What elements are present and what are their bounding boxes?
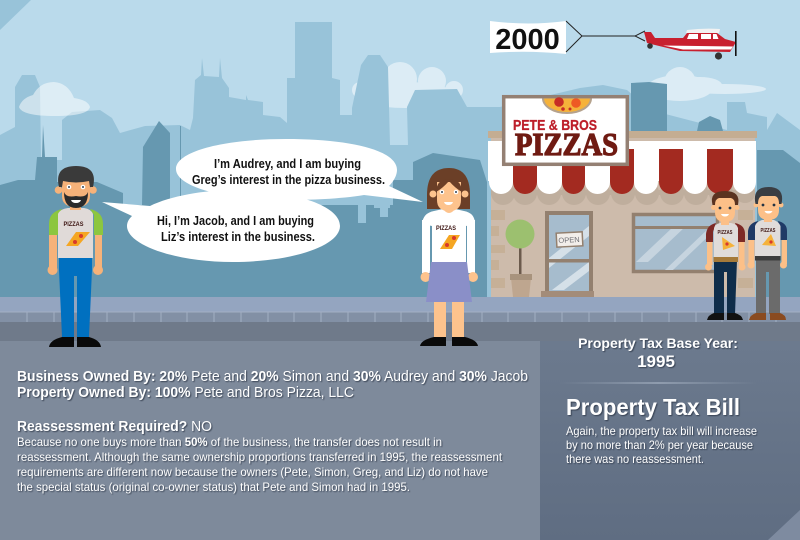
- plane body: [644, 29, 737, 60]
- shirt pizza: [762, 234, 776, 246]
- potted plant: [506, 220, 534, 297]
- tow rope: [566, 21, 645, 52]
- tax bill line 1: Again, the property tax bill will increase: [566, 424, 757, 438]
- ownership text block: [17, 368, 528, 494]
- sidewalk: [0, 297, 800, 341]
- shirt logo: PIZZAS: [436, 225, 457, 232]
- awning: [488, 141, 756, 194]
- character: man in maroon shirt: [705, 191, 746, 320]
- cloud right: [647, 67, 766, 101]
- light skyline: [0, 22, 800, 300]
- Jacob line 2: Liz’s interest in the business.: [161, 229, 315, 244]
- shop window: [634, 214, 718, 272]
- skyline window cutouts: [358, 200, 390, 223]
- sign pizza: [542, 97, 592, 114]
- banner: [490, 21, 566, 54]
- Audrey line 1: I’m Audrey, and I am buying: [214, 156, 361, 171]
- sky background: [0, 0, 800, 300]
- dark tower behind shop: [631, 82, 667, 135]
- reassessment heading: Reassessment Required? NO: [17, 418, 212, 435]
- shirt logo: PIZZAS: [760, 228, 776, 234]
- explanation line 2: reassessment. Although the same ownership proportions transferred in 1995, the reassessment: [17, 450, 503, 464]
- banner year: 2000: [495, 24, 560, 56]
- explanation line 1: Because no one buys more than 50% of the business, the transfer does not result in: [17, 435, 442, 449]
- door: [541, 213, 594, 297]
- speech bubble: Audrey: [176, 139, 423, 202]
- panel: ownership details background: [0, 341, 540, 540]
- Audrey line 2: Greg’s interest in the pizza business.: [192, 172, 385, 187]
- Jacob line 1: Hi, I’m Jacob, and I am buying: [157, 213, 314, 228]
- character: man in navy shirt: [748, 187, 787, 320]
- shirt pizza: [440, 235, 460, 249]
- base year label: Property Tax Base Year:: [578, 335, 738, 351]
- business owned line: Business Owned By: 20% Pete and 20% Simon and 30% Audrey and 30% Jacob: [17, 368, 528, 385]
- shirt pizza: [722, 237, 735, 250]
- shirt logo: PIZZAS: [64, 221, 84, 228]
- character: Jacob: [48, 166, 103, 347]
- base year value: 1995: [637, 352, 675, 371]
- panel: property tax background: [540, 341, 800, 540]
- open sign: OPEN: [558, 235, 580, 245]
- corner triangle bottom right: [768, 510, 800, 540]
- dark dome behind shop: [697, 116, 723, 131]
- sign name line: PETE & BROS: [513, 117, 597, 134]
- property tax text block: [566, 335, 757, 466]
- shirt logo: PIZZAS: [718, 230, 733, 236]
- roof band: [488, 131, 757, 138]
- open sign: [556, 232, 583, 247]
- wall bricks: [491, 210, 753, 288]
- shop wall: [491, 138, 755, 297]
- property owned line: Property Owned By: 100% Pete and Bros Pizza, LLC: [17, 384, 354, 401]
- explanation line 4: the special status (original co-owner status) that Pete and Simon had in 1995.: [17, 480, 410, 494]
- sign pizzas word: PIZZAS: [515, 126, 618, 162]
- speech bubble: Jacob: [102, 190, 340, 262]
- tax bill line 3: there was no reassessment.: [566, 452, 704, 466]
- tax bill heading: Property Tax Bill: [566, 394, 740, 420]
- airplane with banner: [490, 21, 737, 60]
- pizza shop: [488, 97, 757, 297]
- explanation line 3: requirements are different now because the owners (Pete, Simon, Greg, and Liz) do not have: [17, 465, 488, 479]
- cloud left: [19, 82, 90, 116]
- shop sign: [504, 97, 627, 164]
- dark skyline: [0, 121, 800, 300]
- shirt pizza: [66, 232, 90, 246]
- corner triangle top left: [0, 0, 31, 30]
- cloud middle: [352, 62, 463, 108]
- character: Audrey: [420, 168, 478, 346]
- tax bill line 2: by no more than 2% per year because: [566, 438, 753, 452]
- awning shadow: [491, 181, 755, 205]
